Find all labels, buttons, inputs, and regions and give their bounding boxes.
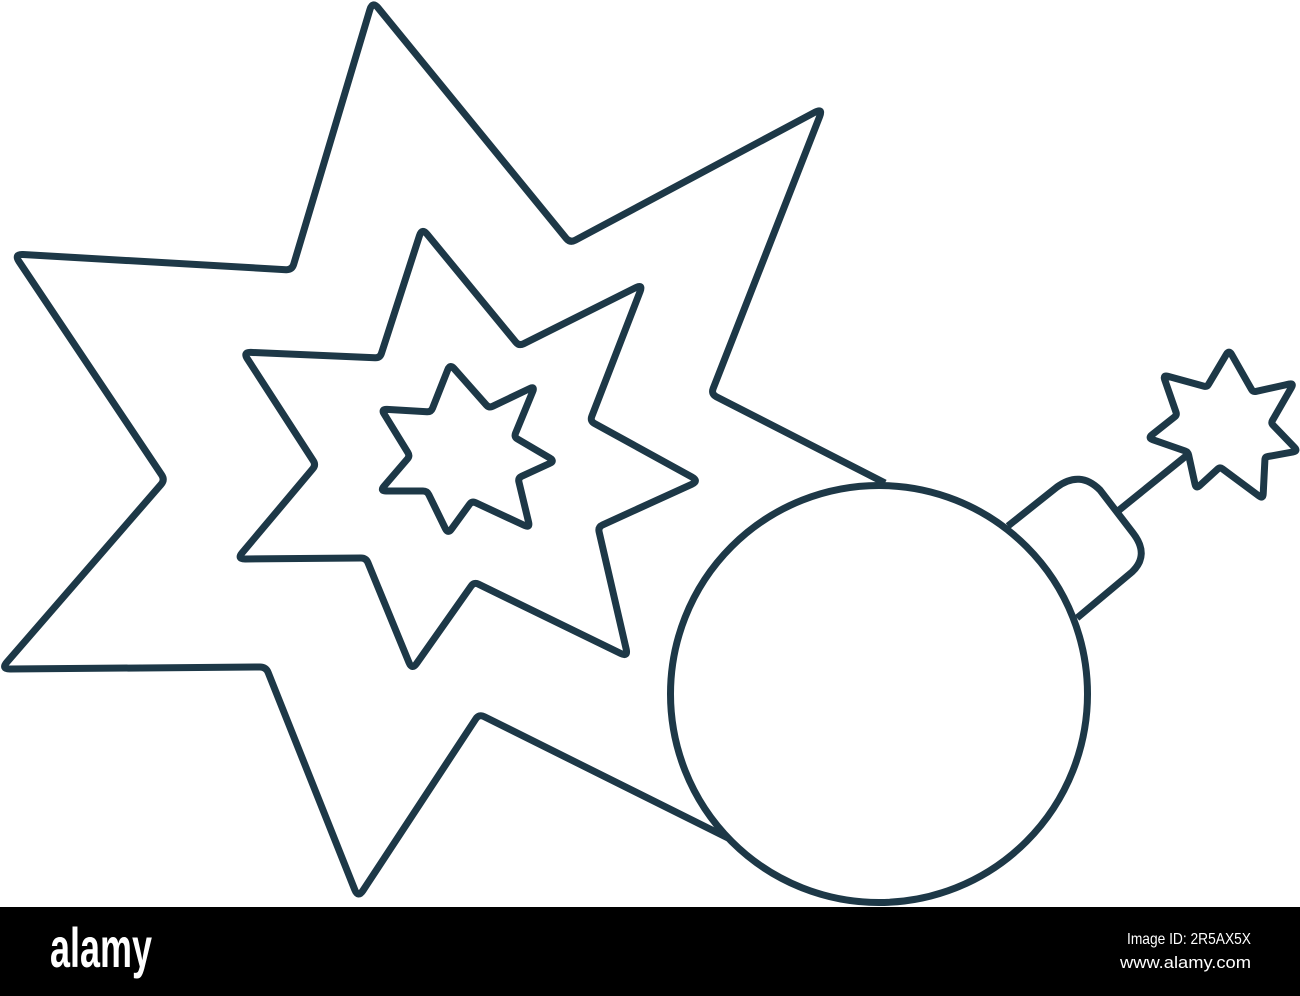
outer explosion star (5, 5, 885, 894)
alamy logo: alamy (50, 916, 152, 979)
fuse line (1118, 456, 1186, 511)
inner explosion star (382, 366, 552, 531)
bomb body (670, 486, 1088, 902)
fuse spark star (1150, 352, 1296, 497)
footer bar (0, 907, 1300, 996)
bomb cap (1008, 479, 1141, 618)
image id: Image ID: 2R5AX5X (1127, 931, 1251, 948)
website: www.alamy.com (1119, 953, 1251, 972)
middle explosion star (240, 231, 695, 667)
